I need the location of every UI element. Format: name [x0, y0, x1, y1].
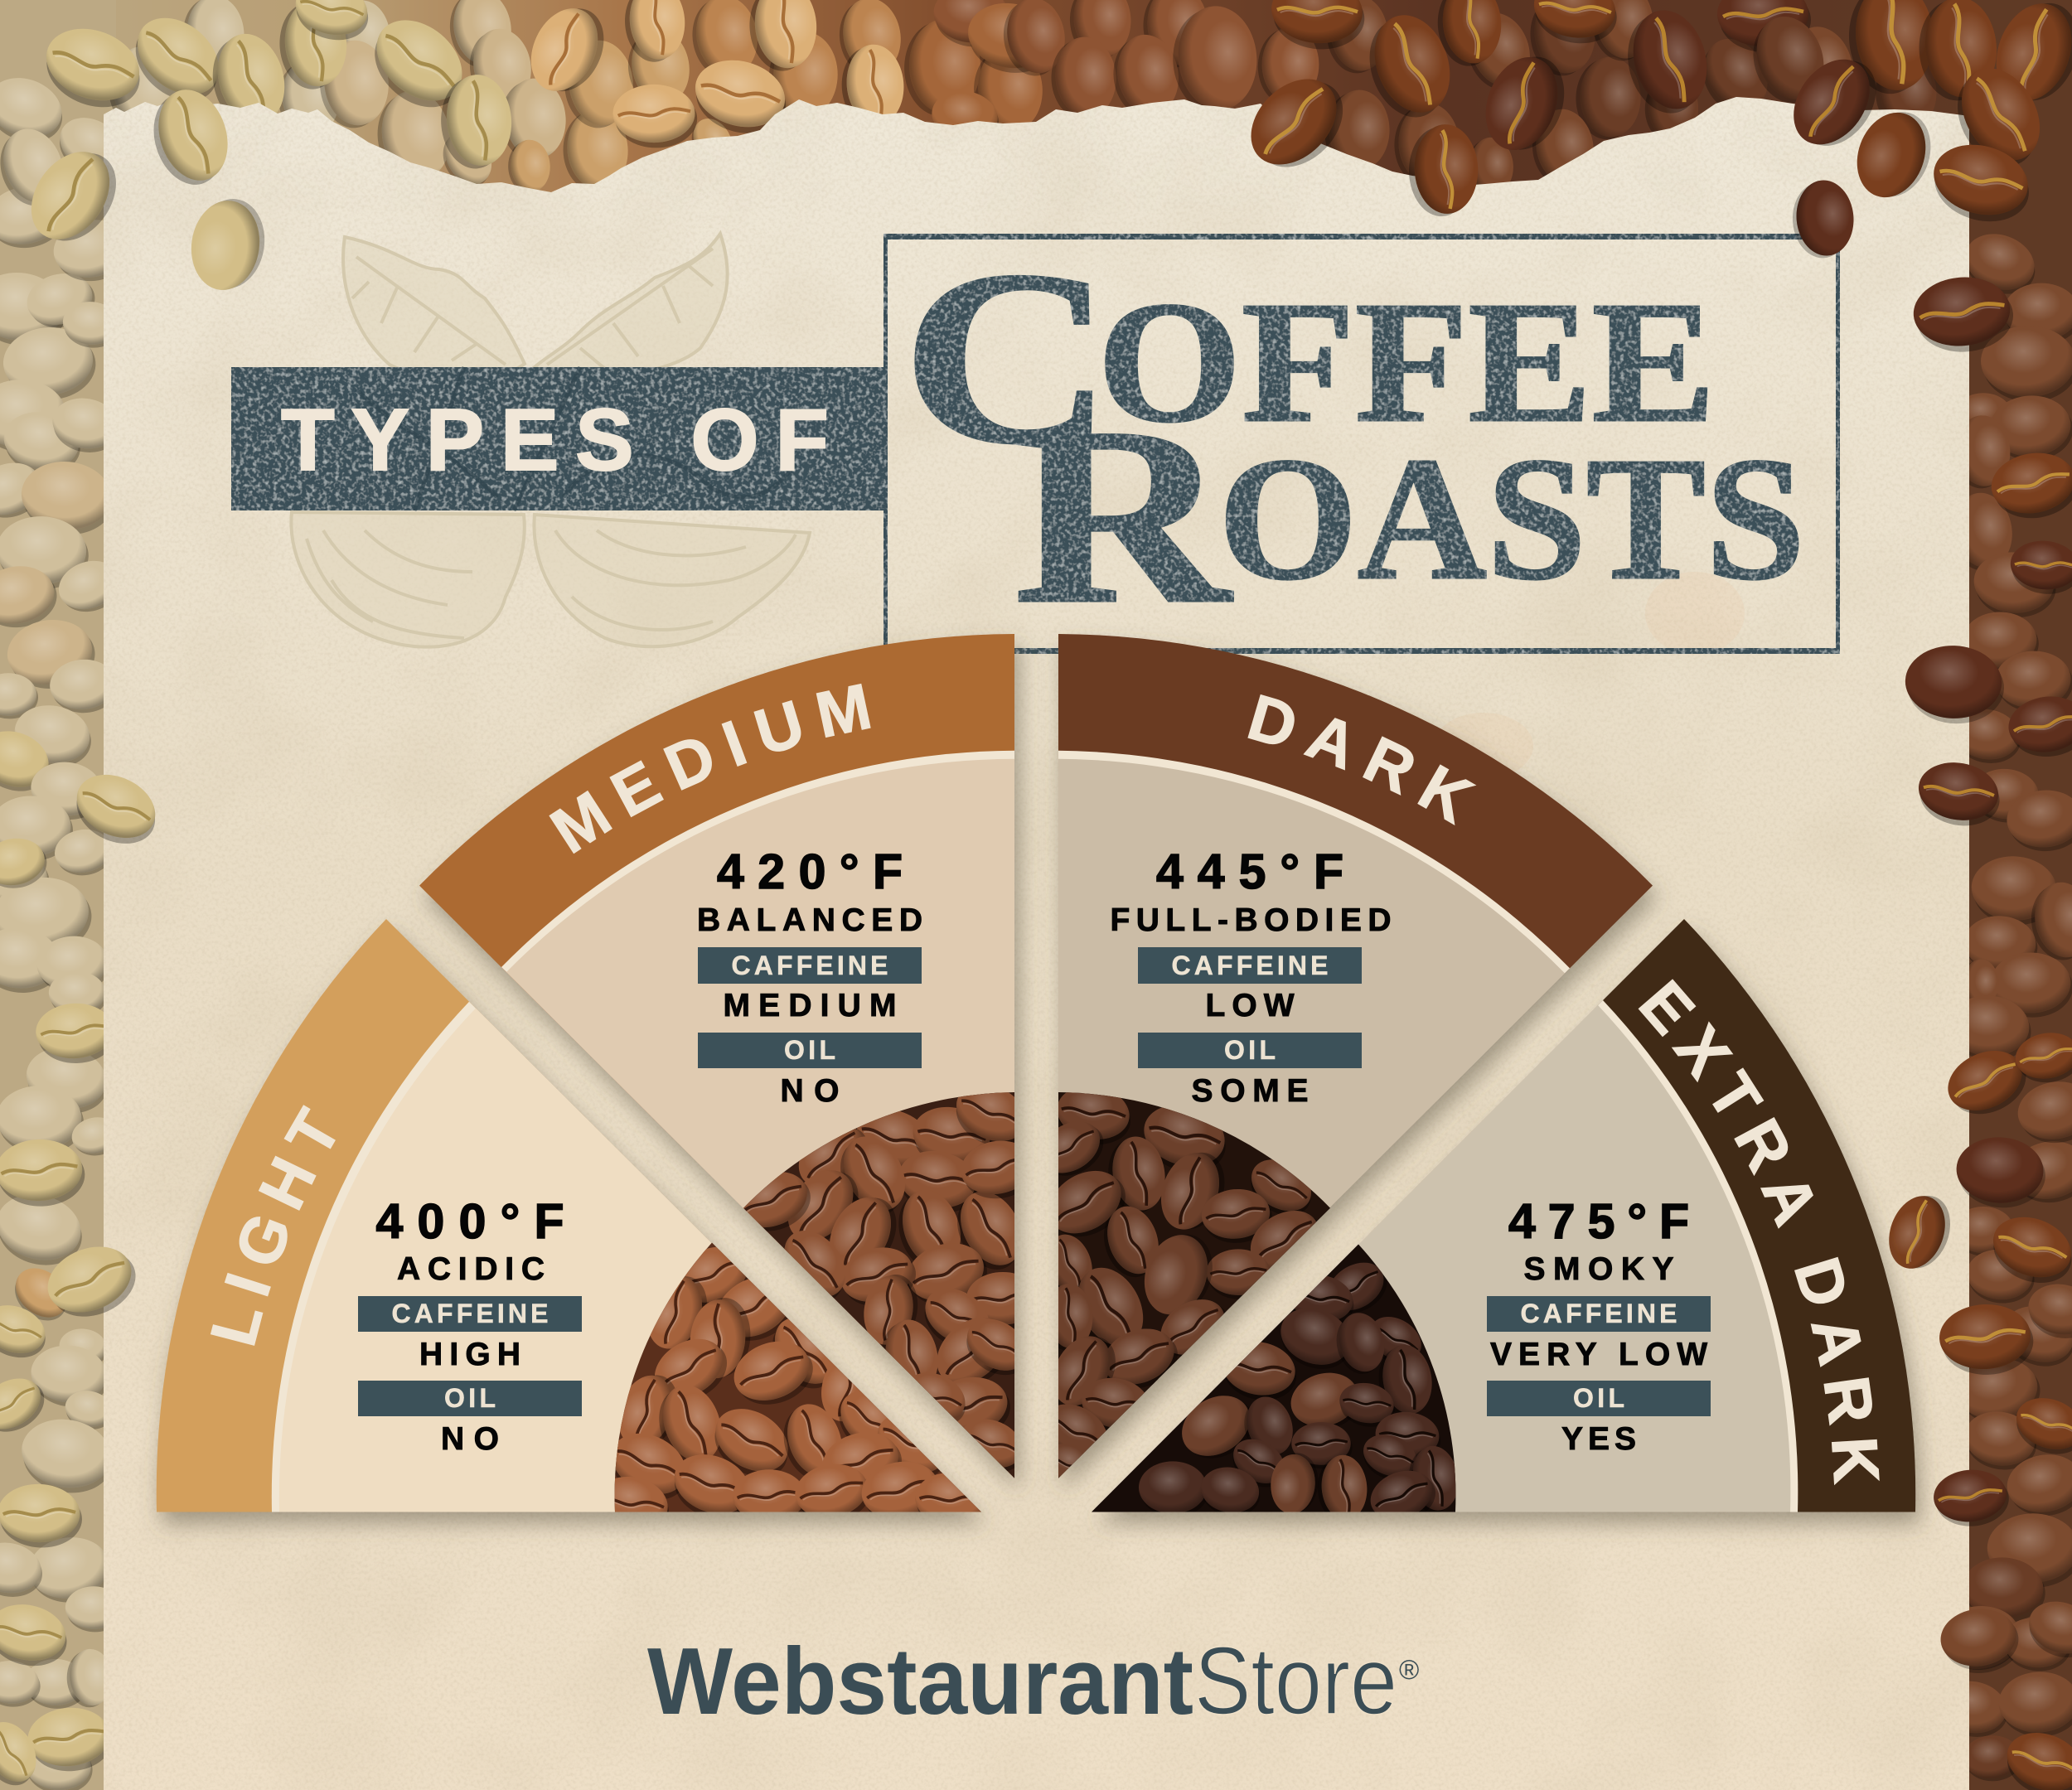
title: COFFEE ROASTS: R	[1013, 375, 1233, 656]
stats: dark roast: CAFFEINE	[1172, 951, 1328, 980]
title: COFFEE ROASTS: OASTS	[1218, 421, 1805, 616]
logo: WebstaurantStore: ®	[1399, 1654, 1419, 1685]
stats: medium roast: 420°F	[717, 844, 903, 899]
beans: right border	[1934, 225, 2072, 1783]
panel: light roast	[148, 919, 989, 1536]
panel: extra dark roast	[1086, 919, 1915, 1531]
beans: top border	[0, 0, 2072, 215]
loose coffee bean over the frame	[1789, 178, 1857, 260]
stats: dark roast: 445°F	[1156, 844, 1343, 899]
background sketch: coffee leaves and beans	[291, 234, 810, 647]
panel: medium roast	[418, 633, 1033, 1492]
stats: medium roast: CAFFEINE	[731, 951, 888, 980]
stats: extra dark roast: 475°F	[1508, 1194, 1689, 1249]
stats: light roast: ACIDIC	[397, 1251, 545, 1287]
stats: light roast: 400°F	[376, 1194, 564, 1249]
logo: WebstaurantStore: Store	[1194, 1627, 1397, 1734]
stats: extra dark roast: SMOKY	[1523, 1251, 1674, 1287]
bean photo: medium roast	[743, 1092, 1014, 1478]
stats: dark roast: OIL	[1224, 1035, 1276, 1065]
stats: extra dark roast	[1487, 1194, 1711, 1457]
panel: dark roast: DARK	[1247, 694, 1477, 825]
title: COFFEE ROASTS	[902, 220, 1805, 656]
stats: medium roast	[697, 844, 922, 1109]
stats: dark roast: FULL-BODIED	[1111, 902, 1391, 938]
stats: medium roast: NO	[781, 1073, 839, 1109]
stats: medium roast: MEDIUM	[723, 988, 897, 1023]
roast wheel	[148, 633, 1934, 1536]
panel: dark roast	[1031, 634, 1653, 1497]
stats: dark roast: SOME	[1192, 1073, 1308, 1109]
title banner: TYPES OF	[231, 367, 884, 510]
stats: medium roast: OIL	[784, 1035, 835, 1065]
title: COFFEE ROASTS: C	[902, 220, 1113, 495]
panel: light roast: LIGHT	[211, 1105, 336, 1346]
stats: light roast: HIGH	[419, 1337, 520, 1372]
logo: WebstaurantStore: Webstaurant	[647, 1629, 1193, 1734]
stats: light roast: NO	[441, 1421, 499, 1457]
stats: extra dark roast: OIL	[1573, 1383, 1624, 1413]
stats: light roast: CAFFEINE	[391, 1299, 549, 1328]
bean photo: extra dark roast	[1086, 1235, 1464, 1531]
stats: extra dark roast: CAFFEINE	[1520, 1299, 1677, 1328]
stats: dark roast	[1111, 844, 1391, 1109]
stats: light roast: OIL	[444, 1383, 496, 1413]
title: COFFEE ROASTS: OFFEE	[1097, 267, 1716, 458]
stats: medium roast: BALANCED	[697, 902, 922, 938]
title banner: TYPES OF: TYPES OF	[281, 391, 829, 489]
beans: left border	[0, 181, 136, 1790]
stats: extra dark roast: YES	[1561, 1421, 1636, 1457]
panel: extra dark roast: EXTRA DARK	[1625, 967, 1894, 1497]
bean photo: light roast	[615, 1243, 981, 1512]
panel: medium roast: MEDIUM	[549, 683, 871, 854]
bean photo: dark roast	[1031, 1081, 1334, 1497]
stats: light roast	[358, 1194, 582, 1457]
stats: extra dark roast: VERY LOW	[1490, 1337, 1707, 1372]
title frame	[884, 234, 1840, 654]
stats: dark roast: LOW	[1205, 988, 1295, 1023]
